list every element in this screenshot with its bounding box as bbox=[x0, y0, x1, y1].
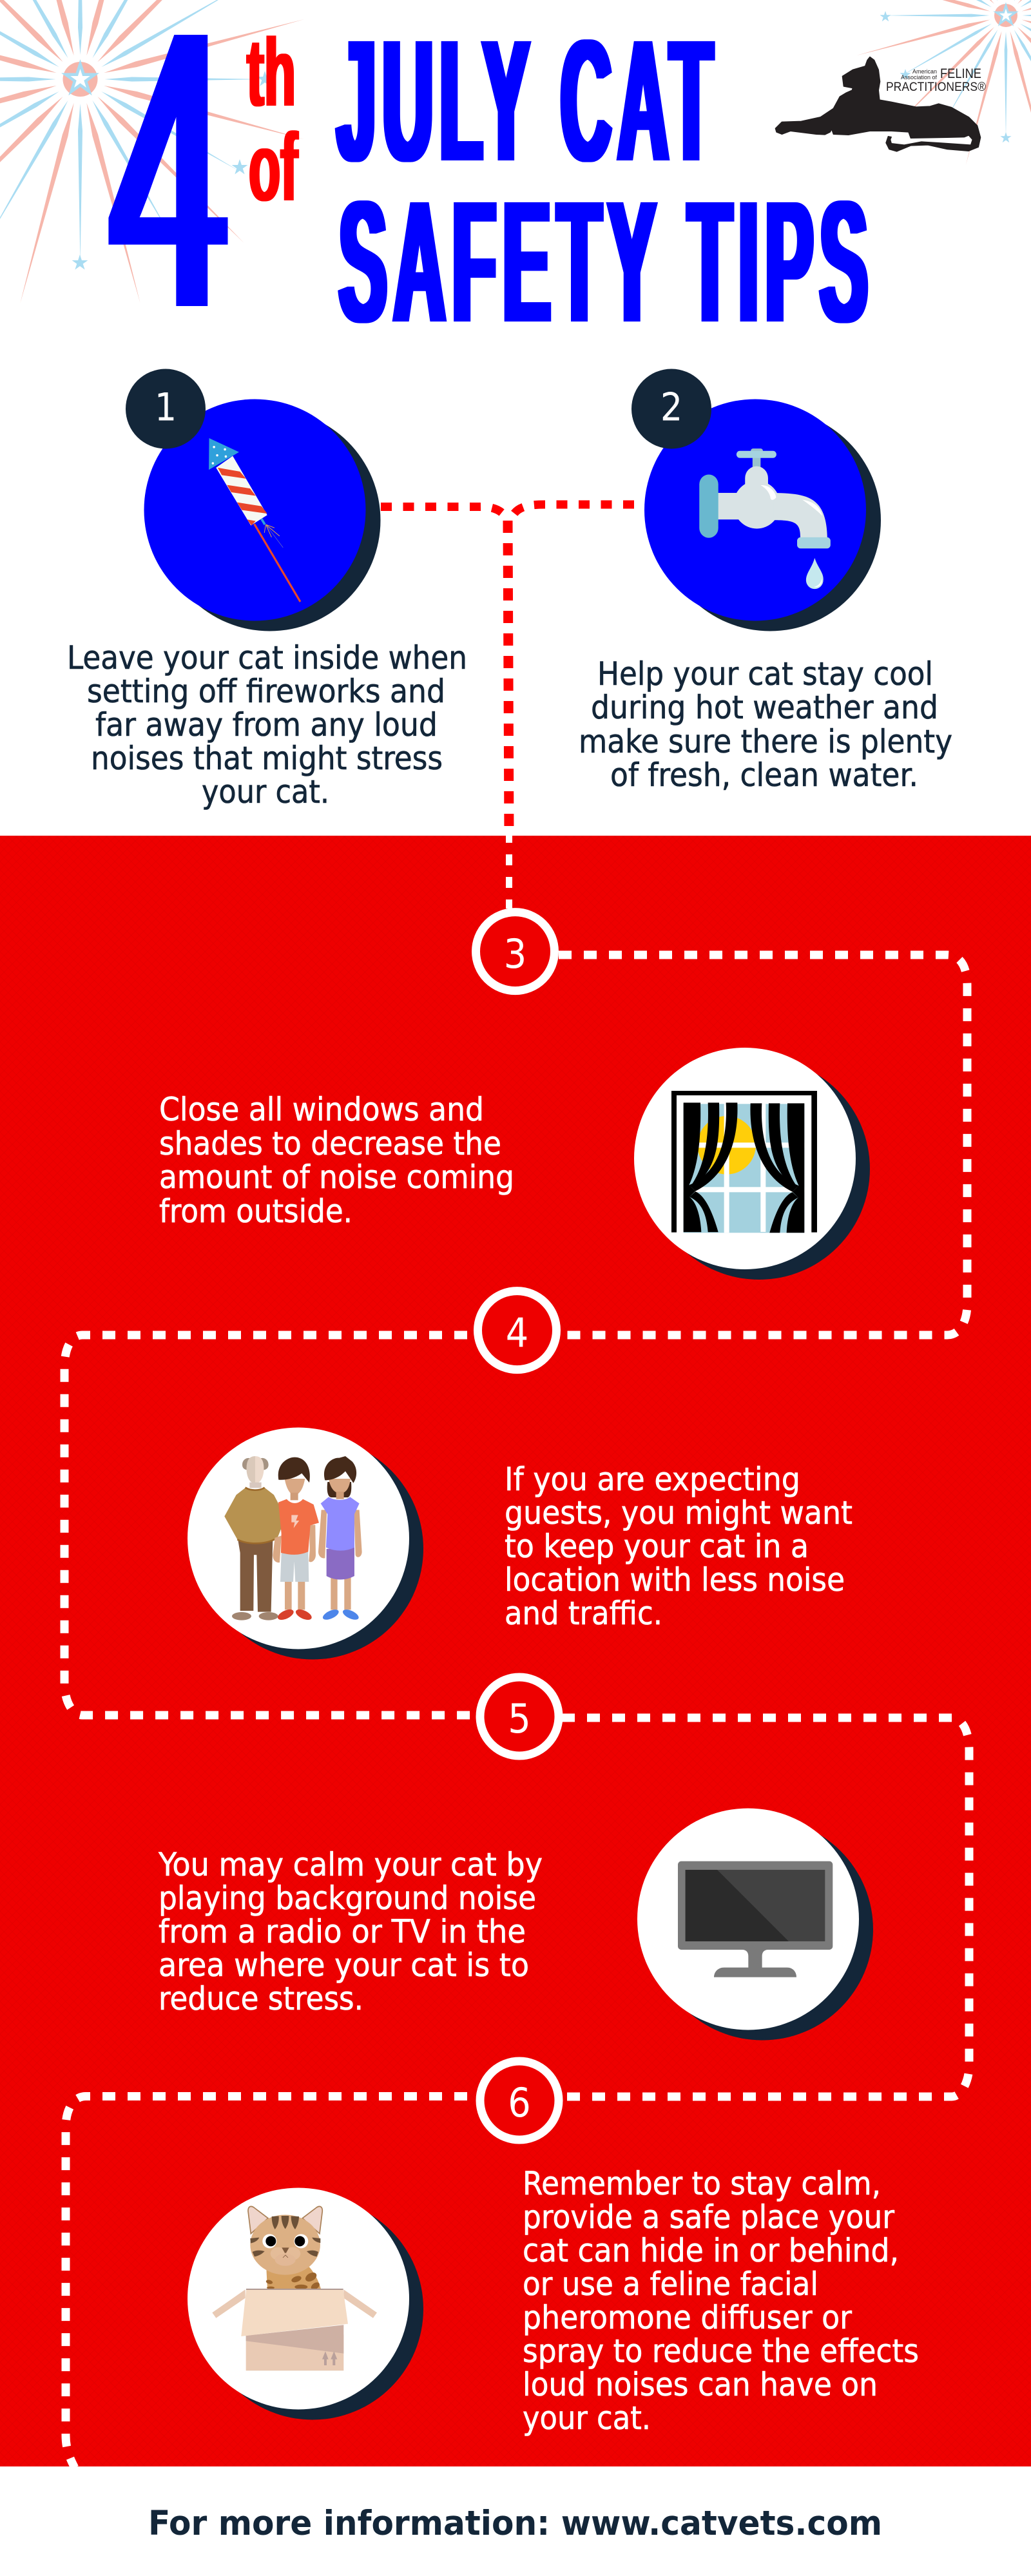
number ring 4: 4 bbox=[506, 1309, 528, 1356]
footer text: For more information: www.catvets.com bbox=[148, 2504, 882, 2543]
number ring 4 bbox=[478, 1291, 557, 1370]
logo text: Association of bbox=[901, 74, 937, 81]
text: step 5 bbox=[158, 1846, 543, 2017]
text: step 5: reduce stress. bbox=[159, 1980, 363, 2017]
text: step 2: make sure there is plenty bbox=[579, 723, 952, 760]
text: step 2 bbox=[579, 655, 952, 794]
number badge 1 bbox=[126, 369, 206, 448]
text: step 5: You may calm your cat by bbox=[158, 1846, 543, 1883]
connector: steps 3 to 4 bbox=[559, 955, 967, 1335]
text: step 2: Help your cat stay cool bbox=[597, 655, 933, 693]
logo text: PRACTITIONERS® bbox=[886, 80, 987, 94]
circle shadow bbox=[202, 2198, 423, 2420]
number ring 5 bbox=[480, 1677, 559, 1756]
panel: step 3 windows bbox=[159, 912, 870, 1280]
circle shadow bbox=[648, 1058, 870, 1280]
connector: red vertical dashes bbox=[508, 521, 509, 838]
icon: cat in a box bbox=[212, 2206, 377, 2370]
logo text bbox=[886, 66, 987, 94]
number ring 5: 5 bbox=[508, 1695, 531, 1742]
circle shadow bbox=[202, 1438, 423, 1660]
logo text: FELINE bbox=[940, 66, 981, 81]
white circle bbox=[188, 1428, 409, 1649]
icon: three people bbox=[224, 1456, 362, 1622]
footer band bbox=[0, 2466, 1031, 2576]
text: step 2: of fresh, clean water. bbox=[610, 756, 918, 794]
number ring 6: 6 bbox=[508, 2079, 531, 2126]
number ring 3 bbox=[476, 912, 554, 991]
number badge 2 bbox=[631, 369, 711, 448]
text: step 6: spray to reduce the effects bbox=[523, 2332, 919, 2370]
text: step 5: playing background noise bbox=[159, 1879, 536, 1917]
panel: step 1 fireworks bbox=[67, 369, 467, 811]
connector: steps 5 to 6 bbox=[562, 1718, 969, 2097]
panel: red section background bbox=[0, 836, 1031, 2466]
icon: television bbox=[678, 1861, 833, 1977]
number badge 2: 2 bbox=[660, 385, 682, 430]
text: step 4: and traffic. bbox=[505, 1595, 662, 1632]
text: step 5: from a radio or TV in the bbox=[159, 1913, 526, 1950]
text: step 6 bbox=[523, 2165, 919, 2437]
number ring 3: 3 bbox=[504, 930, 526, 977]
text: step 5: area where your cat is to bbox=[159, 1946, 529, 1984]
text: step 3: shades to decrease the bbox=[159, 1125, 501, 1162]
text: step 3: from outside. bbox=[159, 1193, 352, 1230]
text: step 1: setting off fireworks and bbox=[87, 673, 445, 710]
text: step 4: If you are expecting bbox=[505, 1461, 800, 1498]
text: step 3: amount of noise coming bbox=[159, 1158, 514, 1196]
text: step 1: your cat. bbox=[202, 773, 329, 811]
text: step 1: far away from any loud bbox=[95, 706, 438, 744]
text: step 3 bbox=[159, 1091, 514, 1230]
connector: white dashes into step 3 bbox=[506, 832, 512, 908]
text: step 6: cat can hide in or behind, bbox=[523, 2232, 899, 2269]
circle shadow bbox=[651, 1818, 873, 2040]
icon: rocket firework bbox=[209, 438, 300, 602]
text: step 4 bbox=[505, 1461, 853, 1632]
text: step 6: your cat. bbox=[523, 2399, 651, 2437]
firework left bbox=[0, 0, 305, 304]
panel: step 2 water bbox=[579, 369, 952, 794]
firework right bbox=[856, 0, 1031, 166]
panel: step 6 stay calm bbox=[188, 2061, 919, 2437]
title bbox=[111, 0, 874, 390]
connector: red dashes to step 2 bbox=[511, 505, 634, 519]
text: step 4: to keep your cat in a bbox=[505, 1528, 809, 1565]
icon: curtained window bbox=[671, 1091, 817, 1233]
number ring 6 bbox=[480, 2061, 559, 2140]
logo text: American bbox=[912, 68, 937, 75]
connector: red dashes to step 1 bbox=[381, 506, 507, 519]
circle shadow bbox=[659, 410, 881, 631]
text: step 1: noises that might stress bbox=[91, 740, 443, 777]
text: step 1: Leave your cat inside when bbox=[67, 639, 467, 677]
white circle bbox=[637, 1808, 859, 2030]
logo: American Association of Feline Practitioners bbox=[775, 57, 987, 151]
text: step 1 bbox=[67, 639, 467, 811]
logo cat silhouette bbox=[775, 57, 981, 151]
white circle bbox=[188, 2188, 409, 2410]
text: step 6: Remember to stay calm, bbox=[523, 2165, 881, 2202]
connector: step 6 to bottom bbox=[66, 2097, 467, 2468]
text: step 3: Close all windows and bbox=[159, 1091, 484, 1128]
title: th: th bbox=[247, 18, 296, 126]
blue circle bbox=[644, 399, 866, 621]
white circle bbox=[634, 1048, 856, 1269]
title: of: of bbox=[249, 113, 298, 221]
panel: step 4 guests bbox=[188, 1291, 853, 1660]
girl bbox=[318, 1456, 362, 1622]
text: step 2: during hot weather and bbox=[591, 689, 938, 726]
boy bbox=[273, 1457, 319, 1622]
blue circle bbox=[144, 399, 366, 621]
text: step 6: or use a feline facial bbox=[523, 2265, 818, 2303]
text: step 6: provide a safe place your bbox=[523, 2198, 895, 2236]
number badge 1: 1 bbox=[155, 385, 177, 430]
panel: step 5 background noise bbox=[158, 1677, 873, 2040]
text: step 4: location with less noise bbox=[505, 1561, 845, 1599]
text: step 6: pheromone diffuser or bbox=[523, 2299, 853, 2336]
text: step 6: loud noises can have on bbox=[523, 2366, 878, 2403]
old man bbox=[224, 1456, 285, 1620]
icon: water faucet bbox=[699, 448, 831, 589]
circle shadow bbox=[159, 410, 380, 631]
text: step 4: guests, you might want bbox=[505, 1494, 853, 1532]
connector: steps 4 to 5 bbox=[64, 1335, 474, 1715]
